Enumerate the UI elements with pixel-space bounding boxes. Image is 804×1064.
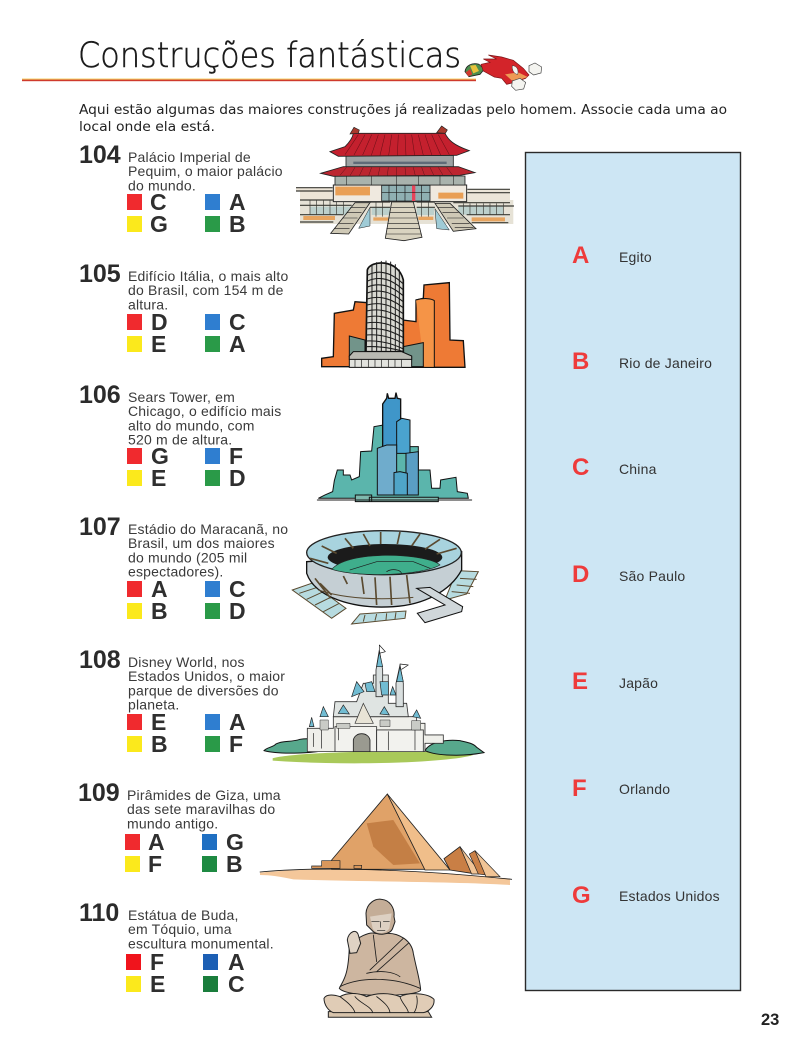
- options 106: G: [151, 443, 169, 469]
- description 109: das sete maravilhas do: [127, 801, 275, 817]
- options 108: B: [151, 731, 168, 757]
- description 106: Sears Tower, em: [128, 389, 235, 405]
- description 106: alto do mundo, com: [128, 417, 255, 433]
- options 109: B: [226, 851, 243, 877]
- options 107: B: [151, 598, 168, 624]
- illustration: pyramids of Giza: [260, 794, 512, 885]
- options 105: [127, 309, 246, 357]
- description 106: 520 m de altura.: [128, 432, 232, 448]
- options 110: A: [228, 949, 245, 975]
- options 109: G: [226, 829, 244, 855]
- illustration: Edifício Itália: [322, 261, 465, 367]
- answer E: Japão: [619, 675, 658, 691]
- answer D: [572, 561, 685, 588]
- description 110: Estátua de Buda,: [128, 907, 239, 923]
- options 110: E: [150, 971, 165, 997]
- options 108: [127, 709, 246, 757]
- page number: 23: [761, 1011, 779, 1029]
- answer B: Rio de Janeiro: [619, 355, 712, 371]
- description 108: Estados Unidos, o maior: [128, 668, 285, 684]
- number 106: 106: [79, 381, 121, 409]
- description 104: Palácio Imperial de: [128, 149, 251, 165]
- options 105: D: [151, 309, 168, 335]
- answer G: [572, 882, 720, 909]
- description 107: Brasil, um dos maiores: [128, 535, 275, 551]
- intro text: [79, 103, 727, 135]
- options 109: A: [148, 829, 165, 855]
- options 107: C: [229, 576, 246, 602]
- options 108: A: [229, 709, 246, 735]
- answer B: [572, 348, 712, 375]
- question 106: [79, 381, 281, 491]
- options 106: F: [229, 443, 243, 469]
- options 104: [127, 189, 246, 237]
- description 108: parque de diversões do: [128, 682, 279, 698]
- description 107: do mundo (205 mil: [128, 549, 247, 565]
- question 107: [79, 513, 288, 624]
- options 106: E: [151, 465, 166, 491]
- description 110: escultura monumental.: [128, 935, 274, 951]
- title underline: [22, 79, 476, 81]
- question 108: [79, 646, 285, 757]
- description 108: Disney World, nos: [128, 654, 245, 670]
- answer E: [572, 668, 658, 695]
- description 105: Edifício Itália, o mais alto: [128, 268, 288, 284]
- answer B: B: [572, 348, 589, 375]
- options 109: F: [148, 851, 162, 877]
- answer C: China: [619, 461, 657, 477]
- number 104: 104: [79, 141, 121, 169]
- options 107: D: [229, 598, 246, 624]
- answer E: E: [572, 668, 588, 695]
- description 110: em Tóquio, uma: [128, 921, 232, 937]
- answer A: A: [572, 242, 589, 269]
- options 110: F: [150, 949, 164, 975]
- options 110: C: [228, 971, 245, 997]
- options 104: A: [229, 189, 246, 215]
- answer D: São Paulo: [619, 568, 685, 584]
- description 109: mundo antigo.: [127, 815, 218, 831]
- options 108: E: [151, 709, 166, 735]
- options 104: B: [229, 211, 246, 237]
- answer G: G: [572, 882, 591, 909]
- answer A: [572, 242, 652, 269]
- question 110: [79, 899, 274, 997]
- number 108: 108: [79, 646, 121, 674]
- answer F: [572, 775, 670, 802]
- panel: answer key: [526, 152, 740, 990]
- description 105: do Brasil, com 154 m de: [128, 282, 284, 298]
- options 109: [125, 829, 244, 877]
- illustration: Buddha statue: [324, 899, 434, 1017]
- answer C: [572, 454, 657, 481]
- description 107: Estádio do Maracanã, no: [128, 521, 288, 537]
- options 105: E: [151, 331, 166, 357]
- options 106: D: [229, 465, 246, 491]
- description 104: do mundo.: [128, 177, 196, 193]
- answer D: D: [572, 561, 589, 588]
- answer C: C: [572, 454, 589, 481]
- description 106: Chicago, o edifício mais: [128, 403, 281, 419]
- description 105: altura.: [128, 296, 168, 312]
- number 107: 107: [79, 513, 121, 541]
- description 107: espectadores).: [128, 564, 223, 580]
- description 108: planeta.: [128, 697, 179, 713]
- question 104: [79, 141, 283, 237]
- question 109: [78, 779, 281, 877]
- options 108: F: [229, 731, 243, 757]
- intro text: Aqui estão algumas das maiores construções já realizadas pelo homem. Associe cada uma ao: [79, 103, 727, 118]
- options 105: A: [229, 331, 246, 357]
- options 107: A: [151, 576, 168, 602]
- answer A: Egito: [619, 249, 652, 265]
- answer G: Estados Unidos: [619, 888, 720, 904]
- description 104: Pequim, o maior palácio: [128, 163, 283, 179]
- answer F: F: [572, 775, 587, 802]
- illustration: Maracanã stadium: [292, 531, 478, 624]
- illustration: Disney castle: [264, 645, 484, 763]
- number 109: 109: [78, 779, 120, 807]
- options 105: C: [229, 309, 246, 335]
- options 104: G: [150, 211, 168, 237]
- illustration: Sears Tower: [317, 393, 472, 502]
- question 105: [79, 260, 288, 357]
- options 110: [126, 949, 245, 997]
- intro text: local onde ela está.: [79, 120, 215, 135]
- icon: red mascot running: [465, 55, 542, 90]
- title: Construções fantásticas: [78, 36, 461, 76]
- illustration: imperial palace: [296, 126, 514, 241]
- options 106: [127, 443, 246, 491]
- options 104: C: [150, 189, 167, 215]
- number 110: 110: [79, 899, 119, 927]
- options 107: [127, 576, 246, 624]
- description 109: Pirâmides de Giza, uma: [127, 787, 281, 803]
- number 105: 105: [79, 260, 121, 288]
- answer F: Orlando: [619, 781, 670, 797]
